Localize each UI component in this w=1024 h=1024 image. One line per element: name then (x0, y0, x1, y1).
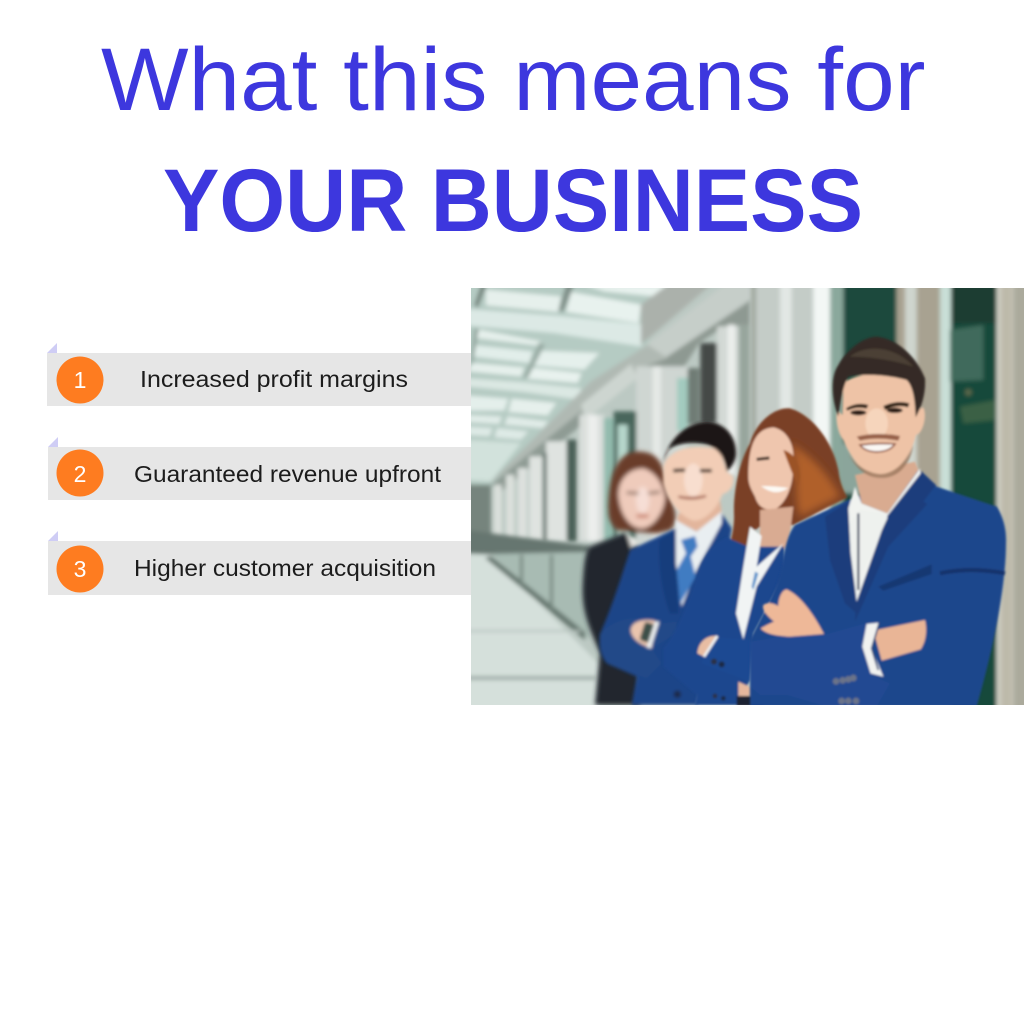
person: woman with curly hair (686, 406, 848, 705)
list item 1: Increased profit margins (140, 366, 408, 392)
person: woman in back (583, 452, 675, 705)
cuff (862, 623, 883, 677)
buttons (833, 675, 859, 704)
list item 2: 2 (74, 461, 86, 487)
columns (636, 366, 688, 553)
face (836, 374, 925, 478)
jacket lapels (825, 502, 857, 613)
list item 3: 3 (74, 556, 86, 582)
brows and eyes (846, 404, 868, 411)
list item 2: Guaranteed revenue upfront (134, 461, 442, 487)
person: man with blue tie (600, 422, 736, 705)
neck (855, 462, 918, 513)
list item 3: Higher customer acquisition (134, 555, 436, 581)
stubble (848, 445, 913, 478)
title: What this means for (101, 31, 926, 130)
forearm (873, 620, 926, 661)
shirt (848, 468, 921, 602)
title (101, 31, 926, 250)
list item 1 (47, 343, 471, 406)
mouth (857, 434, 900, 441)
right side columns and dark glass (750, 283, 1024, 713)
photo background: glass ceiling, columns and floor (464, 281, 1024, 713)
hair (833, 337, 925, 417)
list item 1: 1 (74, 367, 86, 393)
list item 2 (48, 437, 471, 500)
grey structure (641, 285, 711, 345)
hand (761, 589, 824, 637)
person: man in front (750, 337, 1006, 707)
photo: business team in a glass walkway (464, 281, 1024, 713)
title: YOUR BUSINESS (163, 151, 863, 250)
crossed arm (750, 622, 890, 707)
jacket (750, 470, 1006, 707)
infographic canvas (47, 46, 1024, 705)
list item 3 (48, 531, 471, 595)
walkway floor and railing (465, 530, 600, 710)
